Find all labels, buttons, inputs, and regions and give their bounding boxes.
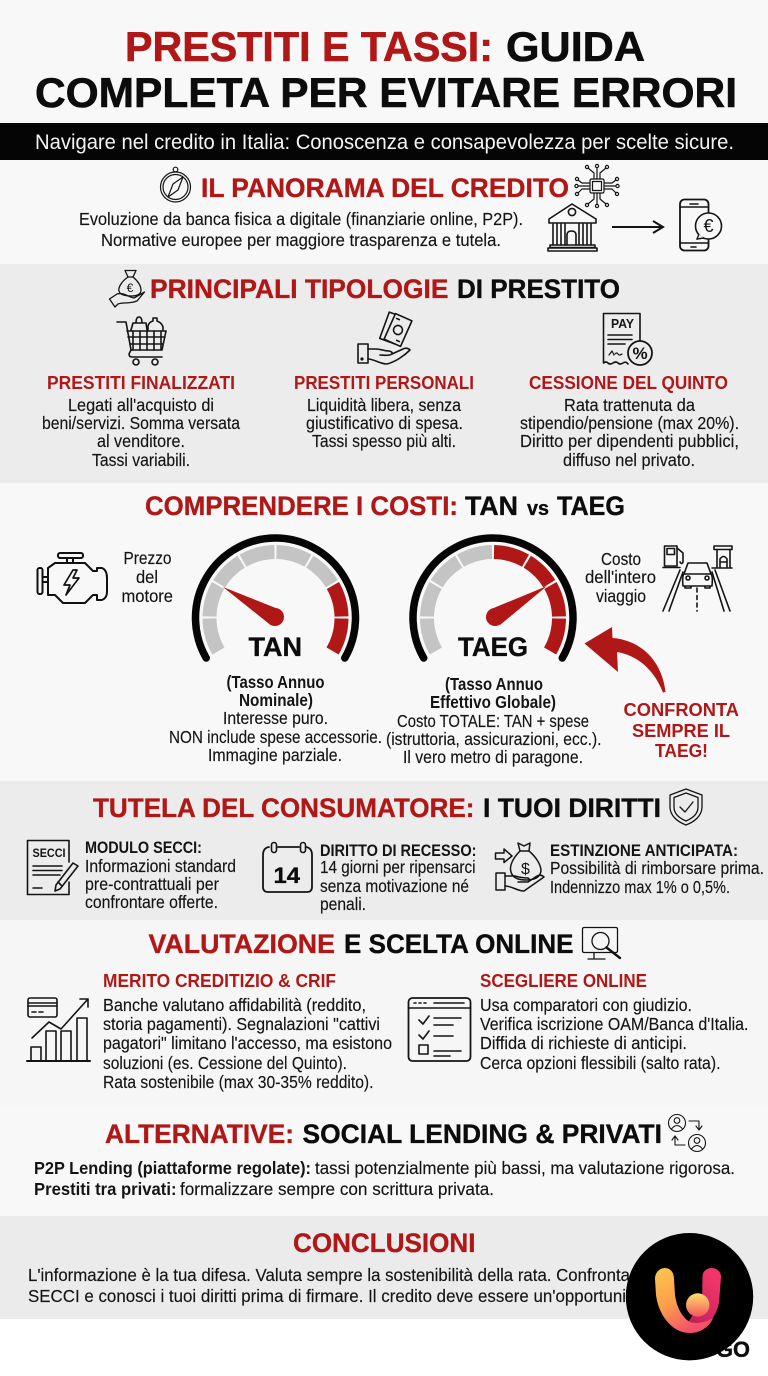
text xyxy=(550,842,764,897)
icon: money bag with arrow and hand: $ xyxy=(521,861,530,878)
text: p2p and private loans: Prestiti tra privati: xyxy=(34,1179,176,1199)
text: p2p and private loans: tassi potenzialmente più bassi, ma valutazione rigorosa. xyxy=(315,1158,735,1178)
subtitle band: Navigare nel credito in Italia: Conoscenza e consapevolezza per scelte sicure. xyxy=(35,131,734,154)
text: p2p and private loans: formalizzare sempre con scrittura privata. xyxy=(180,1179,494,1199)
heading: social lending e privati: ALTERNATIVE: xyxy=(105,1119,294,1149)
title: COMPLETA PER EVITARE ERRORI xyxy=(35,69,737,116)
description: soluzioni (es. Cessione del Quinto). xyxy=(103,1053,347,1073)
panel: panorama del credito xyxy=(0,160,768,264)
text: DIRITTO DI RECESSO: xyxy=(320,842,476,860)
icon: payslip with percent xyxy=(604,314,652,365)
description: Liquidità libera, senza xyxy=(307,395,461,415)
column: cessione del quinto xyxy=(520,314,739,470)
column: prestiti personali xyxy=(294,312,474,451)
heading: tan vs taeg: TAEG xyxy=(557,491,625,521)
text: costo dell'intero viaggio xyxy=(585,549,656,606)
description xyxy=(42,395,240,470)
text: pre-contrattuali per xyxy=(85,874,219,894)
description: pagatori" limitano l'accesso, ma esistono xyxy=(103,1033,392,1053)
subheading: PRESTITI PERSONALI xyxy=(294,373,474,393)
icon: hand with money bag: € xyxy=(127,281,134,295)
description xyxy=(306,395,463,451)
text: panorama description: Normative europee per maggiore trasparenza e tutela. xyxy=(101,230,501,250)
icon: payslip with percent: PAY xyxy=(611,316,634,331)
text: TAEG description: (Tasso Annuo xyxy=(445,674,543,694)
heading: principali tipologie di prestito xyxy=(150,274,620,304)
heading: social lending e privati xyxy=(105,1119,662,1149)
heading: valutazione e scelta online: VALUTAZIONE xyxy=(148,929,335,959)
heading: valutazione e scelta online xyxy=(148,929,574,959)
icon: engine xyxy=(38,553,107,603)
text: prezzo del motore: Prezzo xyxy=(124,548,172,568)
icon: phone with euro xyxy=(680,200,722,250)
text: conclusion xyxy=(28,1265,630,1306)
icon: monitor with magnifier xyxy=(582,928,620,959)
text: panorama description xyxy=(79,209,523,250)
icon: compass xyxy=(160,167,190,202)
description: storia pagamenti). Segnalazioni "cattivi xyxy=(103,1014,380,1034)
partial logo word: GO xyxy=(716,1337,750,1362)
text: TAEG description: Costo TOTALE: TAN + spese xyxy=(397,711,589,731)
icon: hand with money bag xyxy=(110,270,144,307)
icon: people exchange xyxy=(668,1114,706,1152)
text: senza motivazione né xyxy=(320,876,469,896)
text: costo dell'intero viaggio: viaggio xyxy=(596,586,646,606)
icon: road with car, pump and toll booth xyxy=(663,546,732,611)
description: Diritto per dipendenti pubblici, xyxy=(520,431,739,451)
icon: shield xyxy=(670,789,702,825)
title: PRESTITI E TASSI: xyxy=(125,23,493,70)
icon: card and growth chart xyxy=(27,998,90,1061)
heading: i tuoi diritti xyxy=(93,793,661,823)
gauge needle xyxy=(486,586,547,626)
text: ESTINZIONE ANTICIPATA: xyxy=(550,842,738,860)
text: confrontare offerte. xyxy=(85,892,218,912)
text: panorama description: Evoluzione da banca fisica a digitale (finanziarie online, P2P). xyxy=(79,209,523,229)
heading: tan vs taeg: TAN xyxy=(465,491,518,521)
description: Verifica iscrizione OAM/Banca d'Italia. xyxy=(480,1014,748,1034)
description: Legati all'acquisto di xyxy=(68,395,214,415)
text: prezzo del motore xyxy=(122,548,173,606)
text xyxy=(85,839,236,912)
icon: circuit chip xyxy=(575,164,619,208)
description: beni/servizi. Somma versata xyxy=(42,413,240,433)
text: conclusion: SECCI e conosci i tuoi diritti prima di firmare. Il credito deve essere un'opportuni xyxy=(28,1286,626,1306)
header panel xyxy=(0,0,768,123)
heading: social lending e privati: SOCIAL LENDING & PRIVATI xyxy=(302,1119,662,1149)
panel: valutazione e scelta online xyxy=(0,920,768,1105)
heading: principali tipologie di prestito: PRINCIPALI TIPOLOGIE xyxy=(150,274,448,304)
text: TAN description: Nominale) xyxy=(239,690,313,710)
text: Indennizzo max 1% o 0,5%. xyxy=(550,877,730,897)
icon: calendar xyxy=(263,842,312,892)
gauge segments xyxy=(210,552,342,651)
heading: i tuoi diritti: I TUOI DIRITTI xyxy=(483,793,661,823)
item: diritto di recesso xyxy=(263,842,476,914)
text: 14 giorni per ripensarci xyxy=(320,857,476,877)
gauge label: TAEG xyxy=(458,632,528,662)
description: Tassi spesso più alti. xyxy=(312,431,456,451)
heading: il panorama del credito: IL PANORAMA DEL CREDITO xyxy=(201,173,569,203)
gauge outer arc xyxy=(413,538,573,658)
description: stipendio/pensione (max 20%). xyxy=(520,413,739,433)
text: TAEG description: (istruttoria, assicurazioni, ecc.). xyxy=(386,729,602,749)
description: Cerca opzioni flessibili (salto rata). xyxy=(480,1053,720,1073)
subheading: SCEGLIERE ONLINE xyxy=(480,971,647,991)
item: estinzione anticipata xyxy=(496,842,764,897)
icon: phone with euro: € xyxy=(703,216,714,236)
subtitle band xyxy=(0,123,768,160)
heading: principali tipologie di prestito: DI PRESTITO xyxy=(457,274,620,304)
text: p2p and private loans: P2P Lending (piattaforme regolate): xyxy=(34,1158,311,1178)
text: TAEG description: Il vero metro di paragone. xyxy=(403,747,583,767)
icon: shopping cart xyxy=(117,317,166,365)
text: TAN description: NON include spese accessorie. xyxy=(169,727,382,747)
text: TAEG description xyxy=(386,674,602,767)
icon: secci document xyxy=(28,840,78,894)
heading: tan vs taeg: COMPRENDERE I COSTI: xyxy=(145,491,458,521)
item: modulo secci xyxy=(28,839,236,912)
icon: payslip with percent: % xyxy=(632,344,648,363)
gauge needle xyxy=(223,587,284,626)
arrow: bank to phone xyxy=(612,221,663,233)
text: costo dell'intero viaggio: Costo xyxy=(601,549,641,569)
description: diffuso nel privato. xyxy=(563,450,695,470)
description: Diffida di richieste di anticipi. xyxy=(480,1033,687,1053)
description: giustificativo di spesa. xyxy=(306,413,463,433)
chart: TAN gauge xyxy=(196,538,356,662)
text: costo dell'intero viaggio: dell'intero xyxy=(585,567,656,587)
heading: valutazione e scelta online: E SCELTA ONLINE xyxy=(344,929,574,959)
heading: tan vs taeg: vs xyxy=(527,498,549,520)
text: MODULO SECCI: xyxy=(85,839,202,857)
text: prezzo del motore: del xyxy=(136,567,158,587)
icon: checklist window xyxy=(408,998,470,1061)
description xyxy=(480,995,748,1073)
text xyxy=(320,842,476,914)
description: Usa comparatori con giudizio. xyxy=(480,995,692,1015)
description: al venditore. xyxy=(97,431,185,451)
gauge segments xyxy=(427,552,559,651)
panel: tutela del consumatore xyxy=(0,781,768,920)
text: TAN description: Interesse puro. xyxy=(223,708,328,728)
text: TAEG description: Effettivo Globale) xyxy=(430,692,556,712)
panel: alternative xyxy=(0,1105,768,1216)
icon: secci document: SECCI xyxy=(32,848,66,860)
text: TAN description xyxy=(169,672,382,765)
text: penali. xyxy=(320,894,366,914)
description xyxy=(103,995,392,1092)
subheading: CESSIONE DEL QUINTO xyxy=(529,373,728,393)
chart: TAEG gauge xyxy=(413,538,573,662)
title xyxy=(35,23,737,116)
gauge outer arc xyxy=(196,538,356,658)
callout: confronta sempre il taeg xyxy=(624,700,739,761)
subheading: MERITO CREDITIZIO & CRIF xyxy=(103,971,336,991)
gauge label: TAN xyxy=(248,632,302,662)
arrow: red curved to TAEG xyxy=(584,627,666,692)
heading: tan vs taeg xyxy=(145,491,625,521)
subheading: PRESTITI FINALIZZATI xyxy=(47,373,235,393)
heading: i tuoi diritti: TUTELA DEL CONSUMATORE: xyxy=(93,793,474,823)
icon: calendar: 14 xyxy=(274,863,301,888)
callout: confronta sempre il taeg: SEMPRE IL xyxy=(632,721,730,741)
text: prezzo del motore: motore xyxy=(122,586,173,606)
description: Rata trattenuta da xyxy=(564,395,695,415)
column: scegliere online xyxy=(408,971,748,1073)
heading: conclusioni: CONCLUSIONI xyxy=(293,1228,476,1258)
panel: conclusioni xyxy=(0,1216,768,1319)
column: prestiti finalizzati xyxy=(42,317,240,470)
description xyxy=(520,395,739,470)
text: conclusion: L'informazione è la tua difesa. Valuta sempre la sostenibilità della rata. Confronta xyxy=(28,1265,630,1285)
logo badge xyxy=(626,1233,753,1360)
panel: principali tipologie di prestito xyxy=(0,264,768,483)
callout: confronta sempre il taeg: CONFRONTA xyxy=(624,700,739,720)
callout: confronta sempre il taeg: TAEG! xyxy=(655,741,708,761)
icon: bank xyxy=(548,204,597,251)
description: Banche valutano affidabilità (reddito, xyxy=(103,995,366,1015)
text: p2p and private loans xyxy=(34,1158,735,1199)
description: Tassi variabili. xyxy=(92,450,190,470)
panel: comprendere i costi xyxy=(0,483,768,781)
text: TAN description: Immagine parziale. xyxy=(208,745,342,765)
title: GUIDA xyxy=(506,23,645,70)
text: TAN description: (Tasso Annuo xyxy=(226,672,324,692)
text: Informazioni standard xyxy=(85,856,236,876)
description: Rata sostenibile (max 30-35% reddito). xyxy=(103,1072,374,1092)
icon: money bag with arrow and hand xyxy=(496,843,544,891)
icon: hand with banknotes xyxy=(358,312,412,364)
column: merito creditizio xyxy=(27,971,392,1092)
